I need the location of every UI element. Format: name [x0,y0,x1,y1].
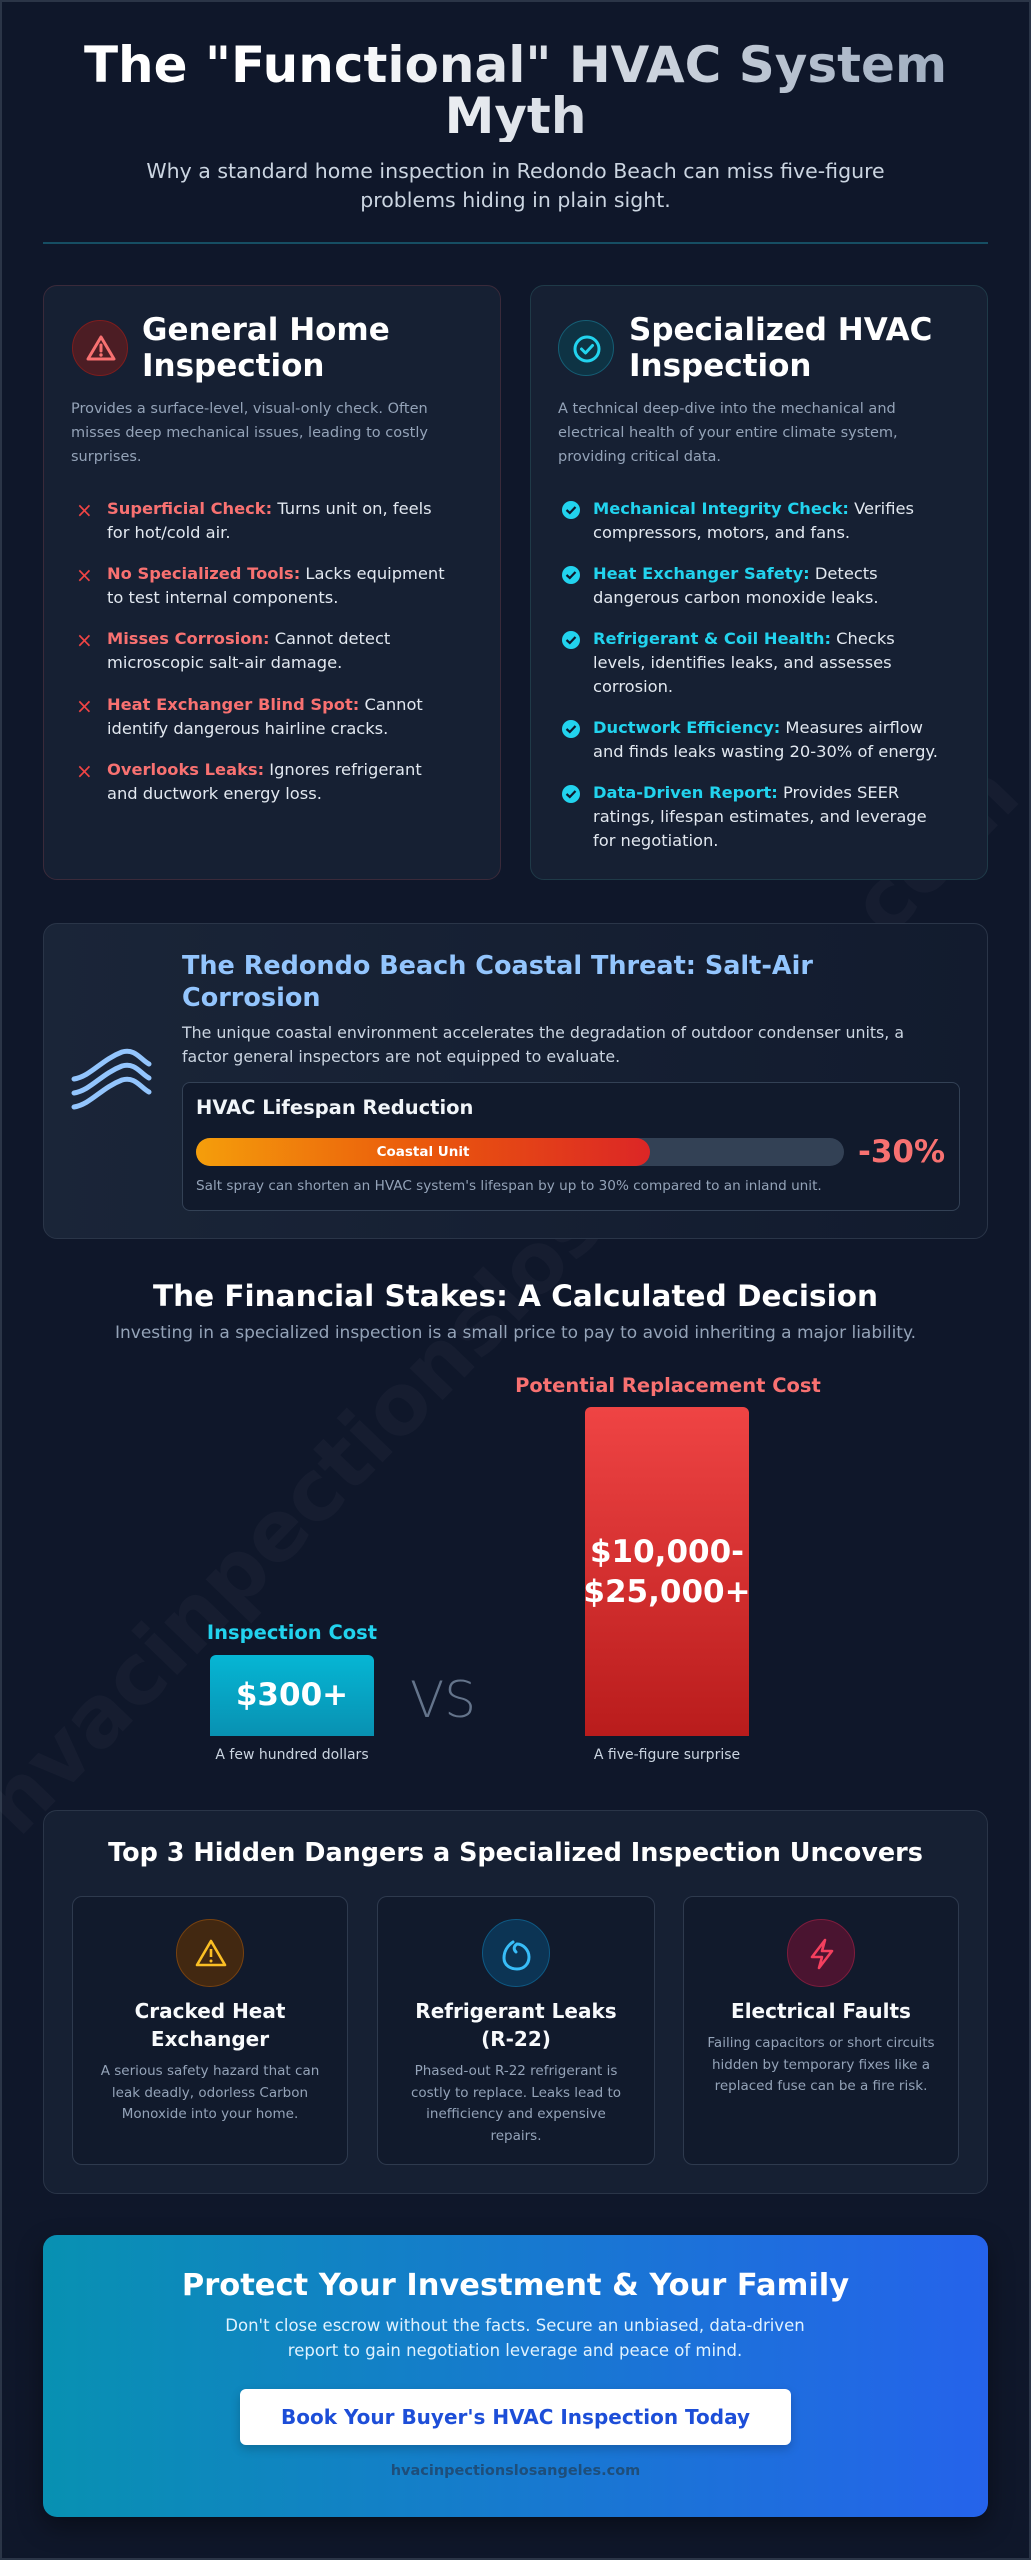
panel: coastal threat [43,923,988,1239]
panel: hidden dangers [43,1810,988,2194]
list: shortcomings [76,498,445,803]
list: benefits: Data-Driven Report: Provides SEER ratings, lifespan estimates, and leverage for negotiation. [593,783,927,850]
list: benefits [562,499,938,850]
chart: cost comparison: $10,000- [590,1534,744,1570]
list: shortcomings: Superficial Check: Turns unit on, feels for hot/cold air. [107,499,432,542]
card: cracked heat exchanger: Cracked Heat [135,1999,285,2023]
list: shortcomings: Heat Exchanger Blind Spot: Cannot identify dangerous hairline cracks. [107,695,423,738]
chart: cost comparison: Potential Replacement Cost [515,1374,821,1397]
card: electrical faults [683,1896,959,2165]
card: electrical faults: Electrical Faults [731,1999,911,2023]
list: shortcomings: Overlooks Leaks: Ignores refrigerant and ductwork energy loss. [107,760,422,803]
list: shortcomings: × [76,628,93,652]
subtitle: problems hiding in plain sight. [360,188,671,212]
list: benefits: Refrigerant & Coil Health: Checks levels, identifies leaks, and assesses corrosion. [593,629,895,696]
subtitle: Investing in a specialized inspection is a small price to pay to avoid inheriting a major liability. [115,1323,916,1343]
title: The "Functional" HVAC System [84,36,947,94]
list: shortcomings: × [76,694,93,718]
heading: financial stakes: The Financial Stakes: A Calculated Decision [153,1279,878,1313]
card: refrigerant leaks: Phased-out R-22 refrigerant is costly to replace. Leaks lead to inefficiency and expensive repairs. [411,2063,621,2144]
icon: drop [482,1919,550,1987]
chart: cost comparison: VS [410,1671,476,1729]
card: electrical faults: Failing capacitors or short circuits hidden by temporary fixes like a replaced fuse can be a fire risk. [707,2035,935,2094]
list: benefits: Ductwork Efficiency: Measures airflow and finds leaks wasting 20-30% of energy. [593,718,938,761]
heading: Specialized HVAC [629,312,932,348]
chart: lifespan reduction: Salt spray can shorten an HVAC system's lifespan by up to 30% compared to an inland unit. [196,1178,822,1194]
icon: warning [176,1919,244,1987]
cta heading: Protect Your Investment & Your Family [182,2268,849,2303]
chart: cost comparison: A five-figure surprise [594,1747,740,1763]
card: refrigerant leaks: Refrigerant Leaks [415,1999,617,2023]
icon: waves [72,1048,152,1110]
value: -30% [858,1134,945,1170]
description: A technical deep-dive into the mechanical and electrical health of your entire climate system, providing critical data. [558,401,898,465]
card: refrigerant leaks [377,1896,655,2165]
chart: cost comparison: $25,000+ [583,1574,751,1610]
heading: Inspection [142,348,324,384]
heading [142,312,390,384]
list: shortcomings: × [76,563,93,587]
call to action [43,2235,988,2517]
subtitle: Why a standard home inspection in Redondo Beach can miss five-figure [146,159,885,183]
heading: Top 3 Hidden Dangers a Specialized Inspection Uncovers [108,1838,923,1868]
card: cracked heat exchanger [72,1896,348,2165]
bar: Coastal Unit [377,1144,469,1160]
button [240,2389,791,2445]
heading [629,312,932,384]
title: Myth [445,87,586,145]
icon: warning [72,320,128,376]
card: refrigerant leaks: (R-22) [481,2027,551,2051]
list: shortcomings: No Specialized Tools: Lacks equipment to test internal components. [107,564,445,607]
card: cracked heat exchanger: Exchanger [151,2027,269,2051]
chart: cost comparison [207,1374,821,1763]
url: hvacinpectionslosangeles.com [391,2463,640,2479]
chart: lifespan reduction [182,1082,960,1211]
panel: specialized hvac inspection [530,285,988,880]
icon: check [558,320,614,376]
subtitle [146,159,885,212]
title [0,40,1031,142]
cta text: Don't close escrow without the facts. Secure an unbiased, data-driven report to gain negotiation leverage and peace of mind. [225,2316,805,2360]
list: benefits: Heat Exchanger Safety: Detects dangerous carbon monoxide leaks. [593,564,879,607]
list: shortcomings: Misses Corrosion: Cannot detect microscopic salt-air damage. [107,629,390,672]
description: The unique coastal environment accelerates the degradation of outdoor condenser units, a factor general inspectors are not equipped to evaluate. [182,1023,904,1066]
chart: lifespan reduction: HVAC Lifespan Reduction [196,1096,473,1119]
list: shortcomings: × [76,759,93,783]
heading [182,951,813,1013]
heading: Corrosion [182,983,320,1013]
list: benefits: Mechanical Integrity Check: Verifies compressors, motors, and fans. [593,499,914,542]
bar [196,1138,844,1166]
heading: The Redondo Beach Coastal Threat: Salt-Air [182,951,813,981]
list: shortcomings: × [76,498,93,522]
description: Provides a surface-level, visual-only check. Often misses deep mechanical issues, leading to costly surprises. [71,401,428,465]
chart: cost comparison: Inspection Cost [207,1621,377,1644]
card: cracked heat exchanger: A serious safety hazard that can leak deadly, odorless Carbon Monoxide into your home. [101,2063,319,2122]
heading: Inspection [629,348,811,384]
chart: cost comparison: $300+ [236,1677,348,1713]
panel: general home inspection [43,285,501,880]
button: Book Your Buyer's HVAC Inspection Today [281,2405,750,2429]
chart: cost comparison: A few hundred dollars [215,1747,369,1763]
icon: bolt [787,1919,855,1987]
heading: General Home [142,312,390,348]
